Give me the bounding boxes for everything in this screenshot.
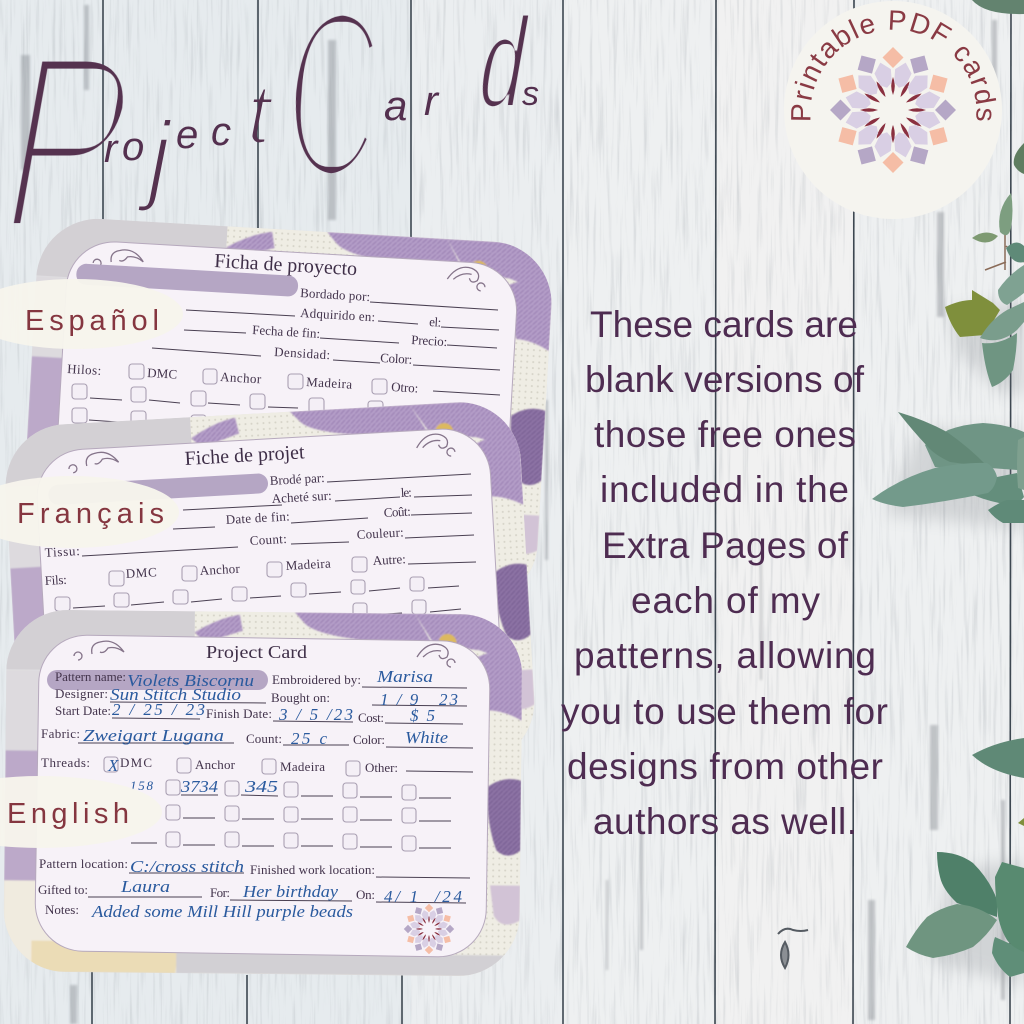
card: English: Notes: — [45, 902, 79, 917]
badge: printable PDF cards — [786, 1, 1002, 219]
card: French: Madeira — [285, 555, 331, 573]
card: English: 25 c — [291, 729, 327, 748]
title: r — [424, 77, 440, 124]
card: French: le: — [400, 484, 412, 500]
card: English: Laura — [120, 877, 170, 896]
body text: Extra Pages of — [602, 525, 849, 566]
body text: authors as well. — [593, 801, 857, 842]
card: French: Fils: — [44, 572, 67, 588]
eucalyptus cluster — [872, 412, 1024, 523]
card: English: Anchor — [195, 757, 236, 772]
card: Spanish: DMC — [147, 365, 178, 382]
card: English: Marisa — [376, 667, 433, 686]
eucalyptus sprig — [945, 193, 1024, 387]
card: French: Couleur: — [356, 524, 404, 542]
card: Spanish: Color: — [380, 350, 413, 367]
card: English: For: — [210, 885, 230, 900]
language label: English — [0, 776, 162, 848]
card: English: Other: — [365, 760, 398, 775]
body text: blank versions of — [585, 359, 865, 400]
card: English: Finished work location: — [250, 862, 375, 877]
eucalyptus lower right — [906, 738, 1024, 977]
language label: Français: Français — [17, 498, 164, 530]
card: French: Fiche de projet — [184, 441, 306, 470]
card: French: DMC — [125, 564, 157, 581]
title: s — [522, 75, 539, 113]
card: English: White — [405, 728, 448, 747]
card: English: Madeira — [280, 759, 325, 774]
card: English: Fabric: — [41, 726, 80, 741]
card: French: Acheté sur: — [271, 488, 332, 506]
body text: designs from other — [567, 746, 883, 787]
card: Spanish: Precio: — [411, 332, 448, 349]
card: English: Bought on: — [271, 690, 330, 705]
card: English: Pattern name: — [55, 669, 126, 684]
card: English: Her birthday — [242, 882, 338, 901]
title — [0, 0, 539, 283]
title: a — [384, 82, 407, 129]
card: English: Sun Stitch Studio — [110, 685, 241, 704]
language label: Français — [0, 476, 179, 548]
card: English: On: — [356, 887, 375, 902]
body text: These cards are — [590, 304, 858, 345]
card: English: Finish Date: — [206, 706, 272, 721]
card: French: Anchor — [199, 561, 241, 578]
card: Spanish: el: — [429, 314, 442, 330]
card: Spanish — [19, 215, 555, 607]
card: English — [3, 609, 523, 977]
card: English: Designer: — [55, 686, 108, 701]
card: French — [2, 399, 538, 789]
badge: printable PDF cards: Printable PDF cards — [791, 10, 996, 120]
card: English: Start Date: — [55, 703, 111, 718]
card: English: C:/cross stitch — [130, 857, 244, 876]
card: English: 4/ 1 /24 — [384, 887, 462, 906]
card: French: Coût: — [383, 504, 411, 520]
card: French: Tissu: — [44, 543, 80, 560]
card: Spanish: Anchor — [220, 369, 262, 386]
card: English: Cost: — [358, 710, 384, 725]
card: English: Added some Mill Hill purple beads — [91, 902, 353, 921]
card: English: 345 — [244, 777, 278, 796]
eucalyptus leaves: top right — [972, 0, 1024, 174]
card: English: 1 / 9 23 — [380, 690, 458, 709]
body text: you to use them for — [561, 691, 888, 732]
leaf shadows — [885, 300, 1024, 985]
body text — [561, 304, 888, 842]
body text: included in the — [600, 469, 849, 510]
card: English: Threads: — [41, 755, 90, 770]
card: English: Project Card — [206, 642, 307, 662]
card: Spanish: Otro: — [391, 379, 419, 396]
body text: patterns, allowing — [574, 635, 876, 676]
card: English: Color: — [353, 732, 385, 747]
title: c — [211, 110, 231, 154]
body text: those free ones — [594, 414, 856, 455]
card: English: 3734 — [180, 777, 219, 796]
card: French: Autre: — [372, 551, 406, 568]
card: English: Pattern location: — [39, 856, 128, 871]
card: English: Gifted to: — [38, 882, 88, 897]
card: Spanish: Fecha de fin: — [252, 322, 321, 341]
card: Spanish: Ficha de proyecto — [214, 250, 358, 280]
card: English: 2 / 25 / 23 — [112, 700, 205, 719]
card: French: Count: — [249, 531, 287, 548]
card: English: X — [107, 756, 119, 775]
body text: each of my — [631, 580, 820, 621]
card: Spanish: Hilos: — [67, 361, 102, 378]
title: o — [122, 125, 144, 169]
card: English: Violets Biscornu — [127, 671, 254, 690]
card: French: Brodé par: — [269, 470, 325, 488]
title: t — [247, 67, 274, 162]
language label: English: English — [7, 798, 129, 830]
card: English: 158 — [130, 778, 154, 793]
card: English: $ 5 — [410, 706, 435, 725]
title: r — [104, 127, 119, 171]
card: English: DMC — [120, 755, 152, 770]
card: French: Date de fin: — [225, 508, 290, 527]
card: English: 3 / 5 /23 — [278, 705, 353, 724]
card: English: Embroidered by: — [272, 672, 361, 687]
title: e — [176, 113, 198, 157]
card: English: Zweigart Lugana — [83, 726, 224, 745]
language label: Español — [0, 279, 183, 349]
card: Spanish: Densidad: — [274, 344, 331, 362]
card: Spanish: Bordado por: — [300, 285, 371, 304]
language label: Español: Español — [25, 305, 159, 337]
title: j — [136, 101, 173, 213]
card: Spanish: Madeira — [306, 374, 353, 392]
card: Spanish: Adquirido en: — [300, 305, 376, 324]
card: English: Count: — [246, 731, 282, 746]
